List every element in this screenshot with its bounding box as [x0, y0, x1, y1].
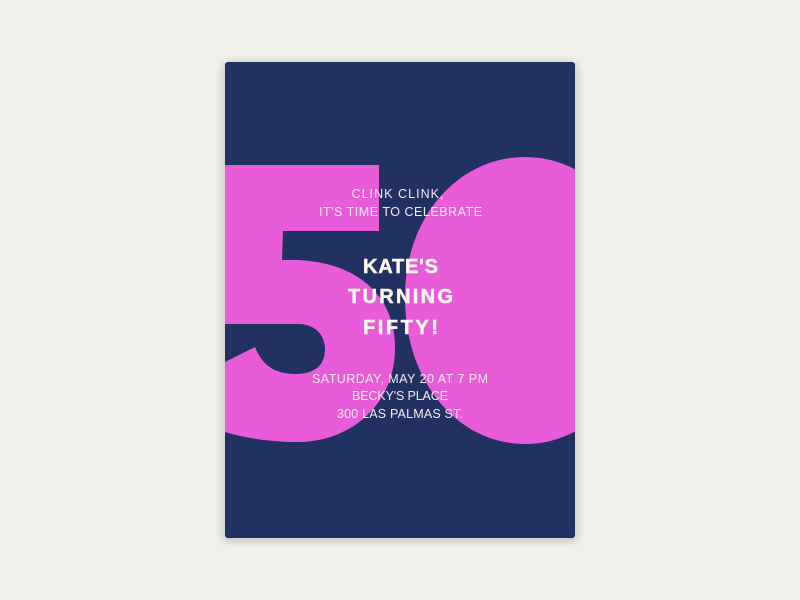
event details: [312, 372, 488, 421]
main heading: FIFTY!: [363, 317, 438, 339]
digit 5: [225, 165, 395, 442]
intro text: IT'S TIME TO CELEBRATE: [319, 205, 482, 219]
digit 0: [405, 157, 575, 444]
navy card background: [225, 62, 575, 538]
event details: SATURDAY, MAY 20 AT 7 PM: [312, 372, 488, 386]
main heading: KATE'S: [363, 256, 438, 278]
big number 50: [225, 157, 575, 444]
event details: BECKY'S PLACE: [352, 389, 448, 403]
main heading: [348, 256, 453, 339]
card shadow: [222, 62, 578, 542]
invitation poster: [219, 59, 581, 545]
intro text: [319, 187, 482, 219]
main heading: TURNING: [348, 286, 453, 308]
intro text: CLINK CLINK,: [352, 187, 444, 201]
event details: 300 LAS PALMAS ST.: [337, 407, 463, 421]
